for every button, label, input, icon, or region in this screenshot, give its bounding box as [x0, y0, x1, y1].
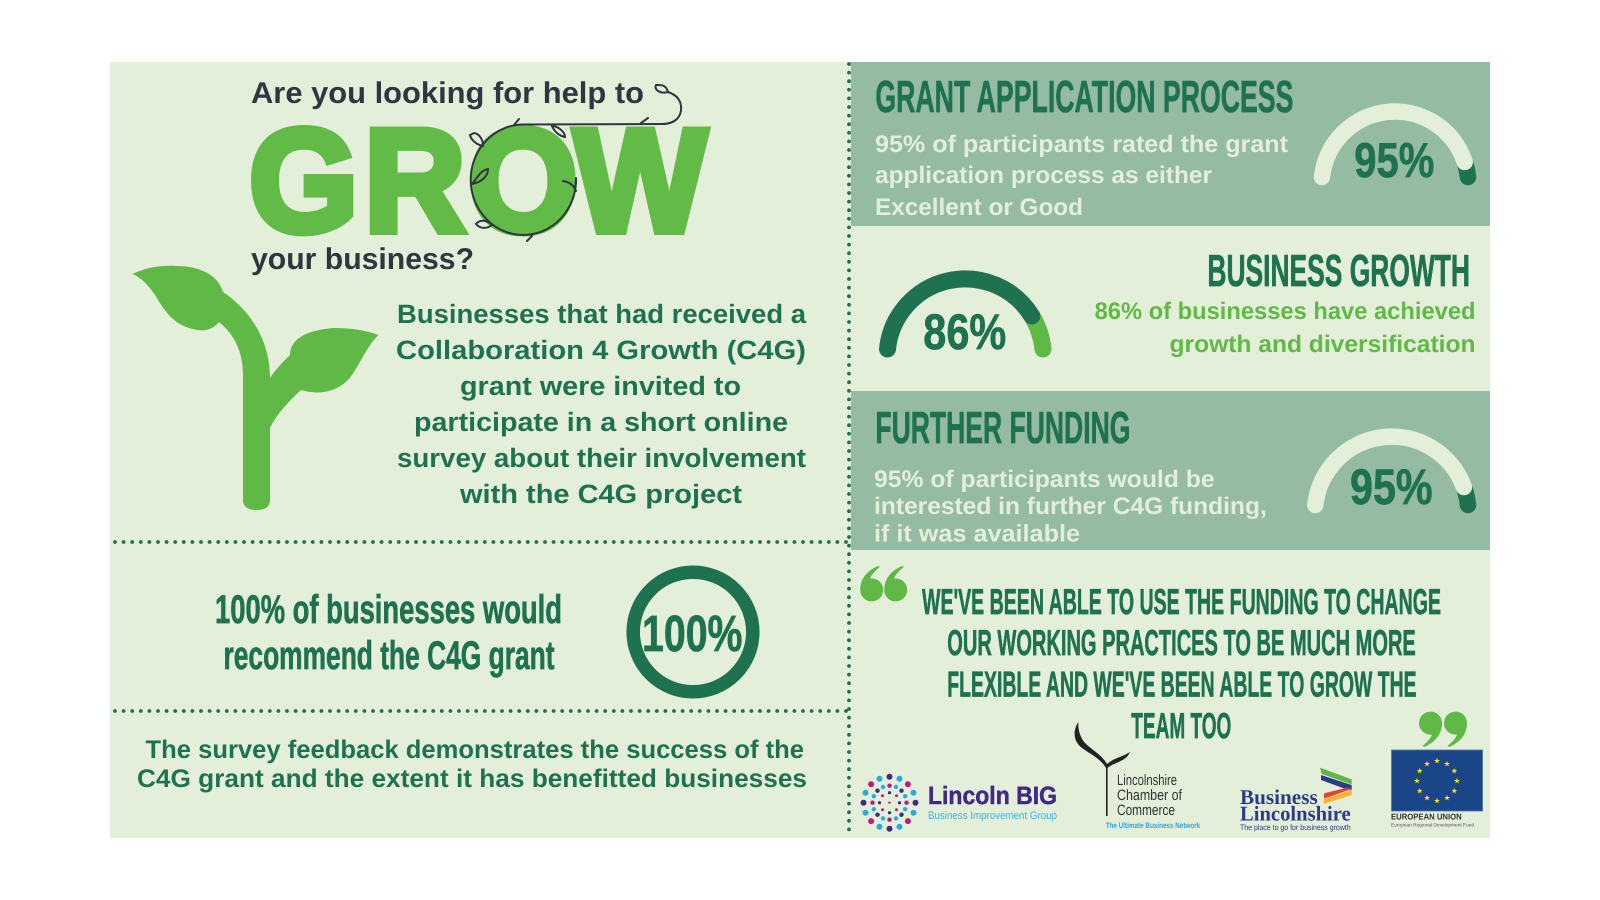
text block: if it was available — [874, 520, 1080, 548]
logo wordmark: Lincoln BIG — [928, 782, 1057, 810]
logo: Business Lincolnshire — [1240, 768, 1352, 832]
logo: Lincolnshire Chamber of Commerce — [1075, 722, 1201, 830]
text block: conclusion — [137, 736, 807, 793]
text block: survey introduction: grant were invited to — [460, 371, 741, 401]
logo sublabel: European Regional Development Fund — [1391, 823, 1474, 829]
text block: recommendation — [215, 588, 562, 678]
icon: EU flag: ★ — [1417, 767, 1423, 775]
icon: EU flag — [1392, 750, 1482, 811]
title: closing line: your business? — [251, 243, 474, 276]
text block: survey introduction: Businesses that had received a — [397, 299, 806, 329]
chart: 100% ring — [633, 572, 753, 692]
icon: opening quote mark — [860, 566, 907, 601]
panel: further funding — [874, 402, 1468, 548]
icon: EU flag: ★ — [1451, 787, 1457, 795]
text block: 95% of participants would be — [874, 466, 1215, 493]
panel: grant application process — [875, 71, 1468, 221]
text block: application process as either — [875, 162, 1212, 189]
icon: EU flag: ★ — [1434, 797, 1440, 805]
logo: Lincoln BIG — [860, 774, 1057, 832]
text block: recommendation: recommend the C4G grant — [224, 634, 554, 678]
icon: EU flag: ★ — [1414, 777, 1420, 785]
chart: 95% gauge: 95% — [1354, 134, 1434, 188]
panel: business growth — [888, 245, 1476, 360]
icon: EU flag: ★ — [1454, 777, 1460, 785]
text block: testimonial quote — [922, 581, 1441, 746]
icon: closing quote mark — [1419, 712, 1467, 747]
icon: EU flag: ★ — [1424, 794, 1430, 802]
logo label: EUROPEAN UNION — [1391, 811, 1462, 821]
title: lead-in line: Are you looking for help to — [251, 77, 644, 110]
logo wordmark: Business — [1240, 785, 1318, 809]
text block: survey introduction: survey about their involvement — [397, 443, 806, 473]
text block: 95% of participants rated the grant — [875, 131, 1288, 158]
icon: EU flag: ★ — [1417, 787, 1423, 795]
logo wordmark: Lincolnshire — [1240, 802, 1351, 826]
text block: growth and diversification — [1170, 331, 1476, 358]
icon: chevrons — [1320, 768, 1352, 804]
icon: EU flag: ★ — [1451, 767, 1457, 775]
logo tagline: Business Improvement Group — [928, 810, 1057, 822]
icon: EU flag: ★ — [1434, 757, 1440, 765]
logo tagline: The Ultimate Business Network — [1106, 821, 1201, 830]
text block: survey introduction — [396, 299, 806, 509]
chart: 95% gauge — [1315, 437, 1468, 515]
heading: GRANT APPLICATION PROCESS — [875, 71, 1293, 122]
text block: survey introduction: with the C4G project — [459, 479, 742, 509]
text block: testimonial quote: TEAM TOO — [1131, 705, 1231, 746]
text block: Excellent or Good — [875, 194, 1083, 221]
icon: vine around the O — [470, 85, 681, 241]
panel: further funding band — [851, 391, 1490, 550]
logo wordmark — [1240, 785, 1351, 832]
logo wordmark: Chamber of — [1117, 787, 1183, 804]
panel: grant application process band — [851, 62, 1490, 226]
text block — [874, 466, 1267, 548]
chart: 95% gauge: 95% — [1350, 459, 1433, 515]
text block: conclusion: C4G grant and the extent it has benefitted businesses — [137, 765, 807, 793]
text block: recommendation: 100% of businesses would — [215, 588, 562, 632]
chart: 100% ring: 100% — [642, 605, 742, 662]
text block: 86% of businesses have achieved — [1095, 298, 1476, 325]
title: GROW: GROW — [249, 99, 707, 262]
icon: EU flag: ★ — [1444, 794, 1450, 802]
text block — [875, 131, 1288, 221]
icon: green sprout — [132, 266, 378, 510]
logo wordmark — [1117, 772, 1183, 819]
icon: EU flag: ★ — [1424, 760, 1430, 768]
chart: 86% gauge: 86% — [923, 304, 1006, 360]
chart: 86% gauge — [888, 279, 1043, 360]
text block: conclusion: The survey feedback demonstrates the success of the — [146, 736, 804, 764]
logo wordmark: Commerce — [1117, 802, 1175, 819]
title — [249, 77, 707, 276]
chart: 95% gauge — [1322, 112, 1468, 188]
text block: survey introduction: Collaboration 4 Growth (C4G) — [396, 335, 806, 365]
icon: black sprout — [1075, 722, 1130, 816]
logo: European Union — [1391, 750, 1482, 829]
panel: background — [110, 62, 1490, 838]
heading: FURTHER FUNDING — [875, 402, 1130, 453]
text block: survey introduction: participate in a short online — [414, 407, 788, 437]
text block: interested in further C4G funding, — [874, 493, 1267, 520]
logo wordmark: Lincolnshire — [1117, 772, 1177, 789]
icon: dot ring — [860, 774, 918, 832]
icon: EU flag: ★ — [1444, 760, 1450, 768]
logo wordmark: The place to go for business growth — [1240, 823, 1351, 832]
text block — [1095, 298, 1476, 358]
